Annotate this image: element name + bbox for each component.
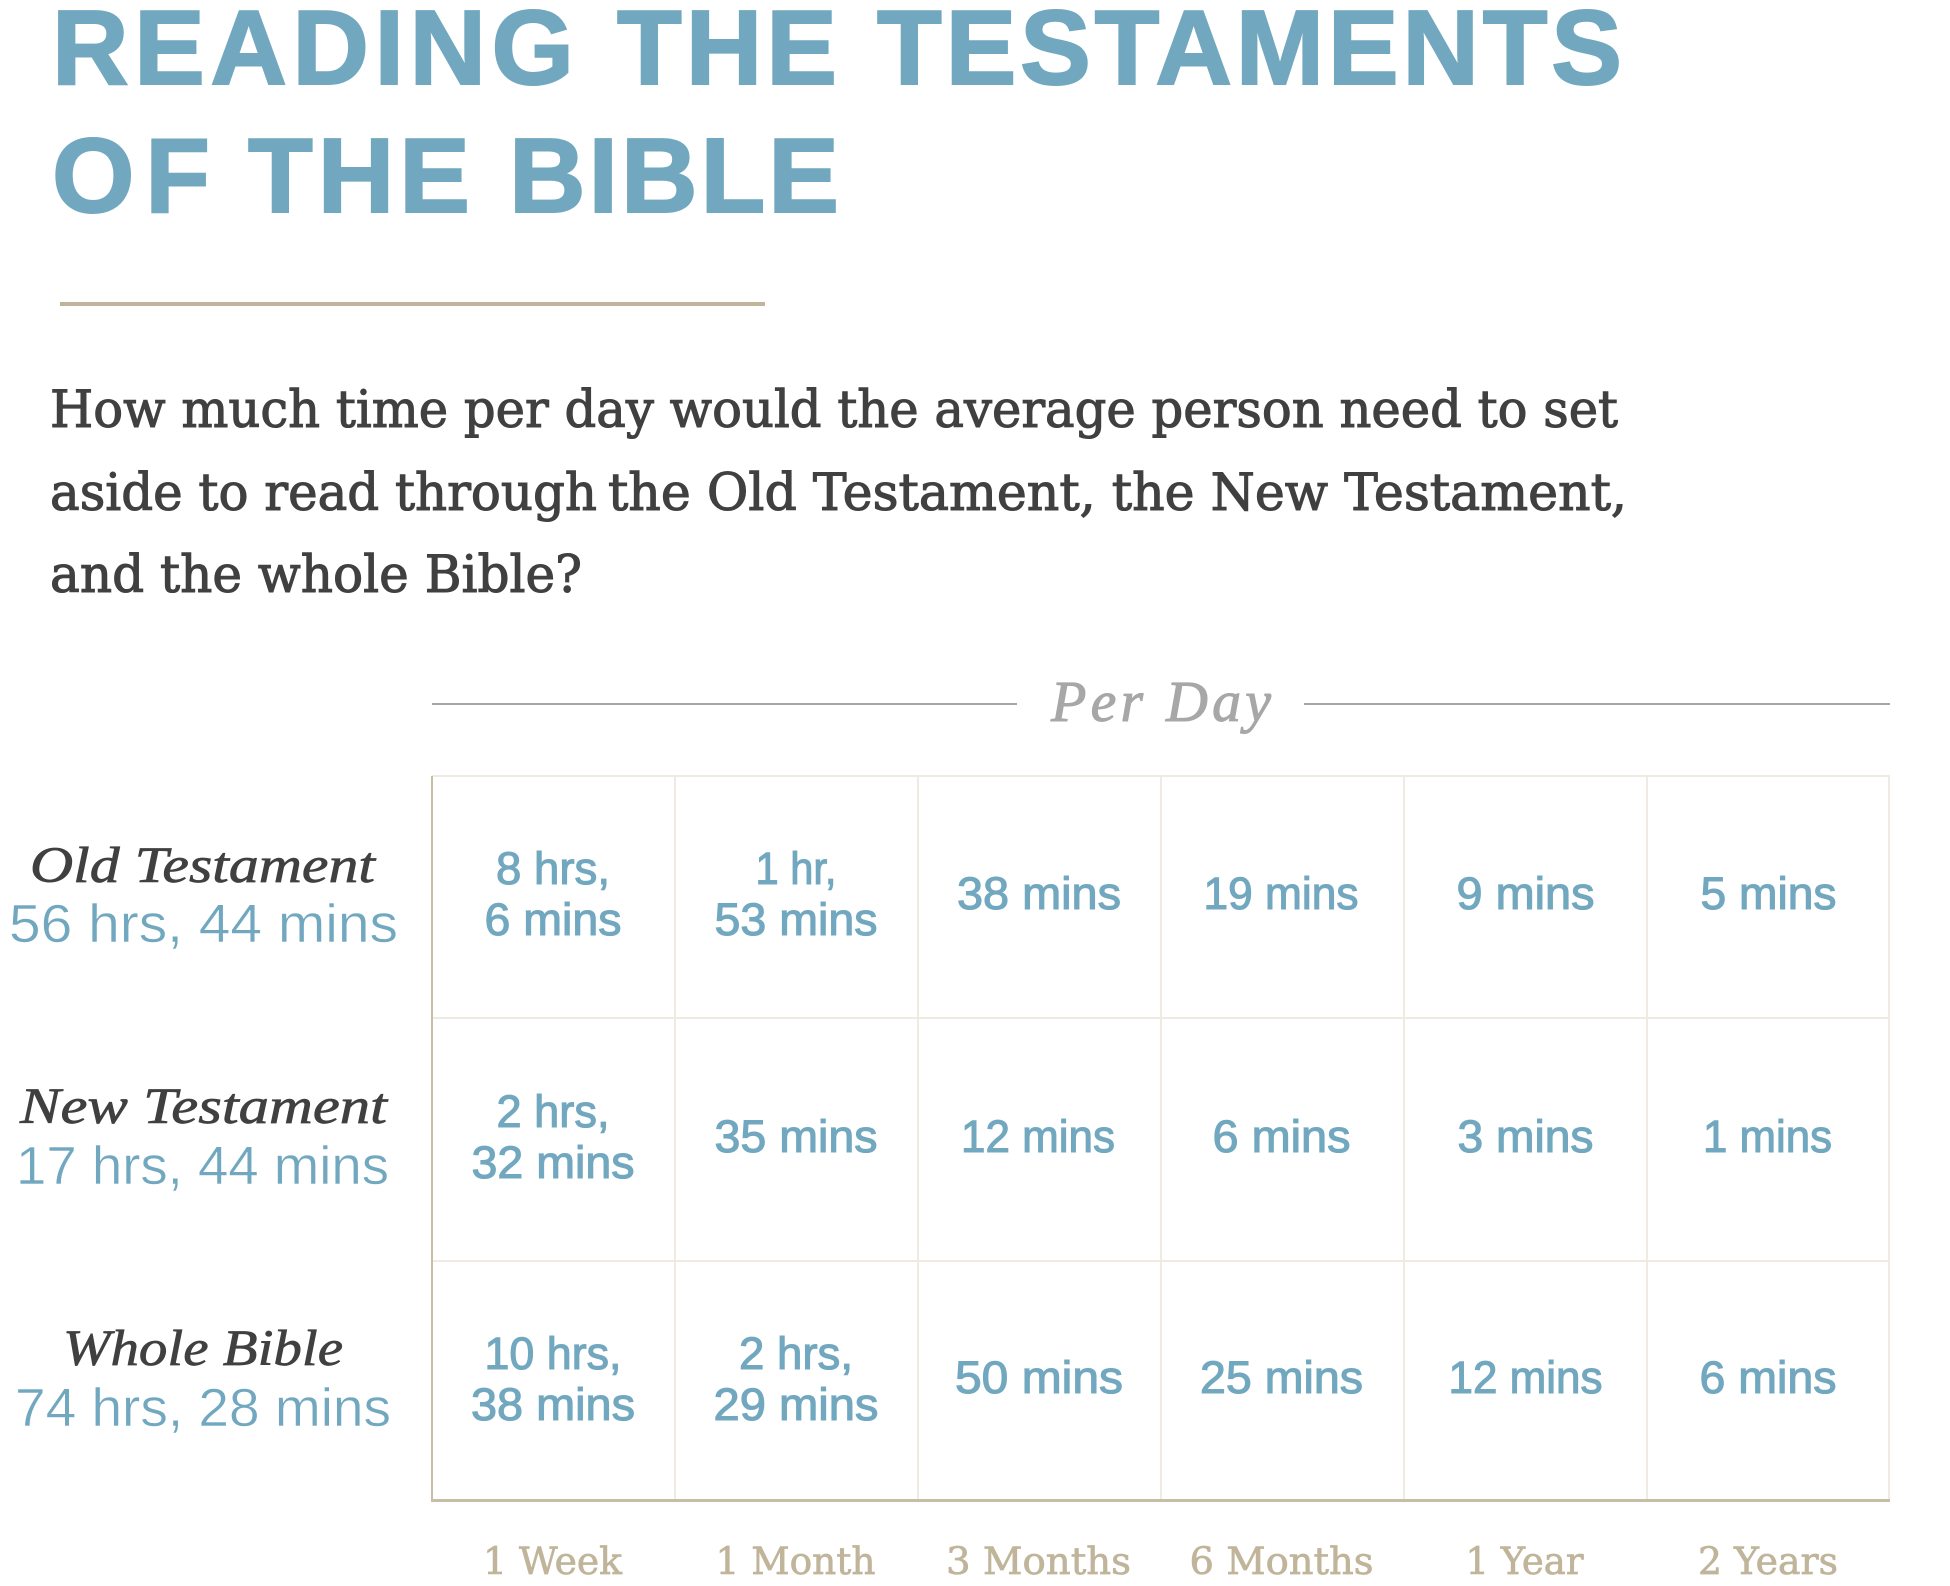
title — [52, 0, 1622, 235]
table values: old testament: 53 mins — [714, 894, 878, 945]
table values: whole bible: 2 hrs, — [739, 1328, 853, 1379]
label: whole bible — [15, 1321, 391, 1438]
table values: old testament: 6 mins — [484, 894, 622, 945]
x-axis labels: 2 Years — [1698, 1540, 1838, 1583]
label: old testament: Old Testament — [30, 838, 377, 894]
title: THE — [248, 117, 470, 235]
intro text — [50, 381, 1627, 605]
intro text: and the whole Bible? — [50, 546, 582, 605]
label: new testament — [16, 1079, 389, 1196]
x-axis labels: 6 Months — [1190, 1540, 1374, 1583]
table values: new testament: 35 mins — [714, 1111, 878, 1162]
table values: whole bible: 29 mins — [714, 1379, 878, 1430]
table values: old testament: 9 mins — [1456, 868, 1594, 919]
table values: whole bible: 12 mins — [1448, 1352, 1602, 1403]
x-axis labels: 3 Months — [946, 1540, 1131, 1583]
table values: new testament: 2 hrs, — [496, 1086, 610, 1137]
x-axis labels — [483, 1540, 1838, 1583]
table values: new testament: 32 mins — [472, 1137, 634, 1188]
intro text: aside to read through — [50, 464, 597, 523]
table values: whole bible: 10 hrs, — [484, 1328, 622, 1379]
label: old testament: 56 hrs, 44 mins — [9, 894, 398, 954]
label: new testament: 17 hrs, 44 mins — [16, 1136, 389, 1196]
row labels — [9, 838, 398, 1438]
intro text: the Old Testament, the New Testament, — [608, 464, 1627, 523]
x-axis labels: 1 Month — [716, 1540, 876, 1583]
x-axis labels: 1 Week — [483, 1540, 623, 1583]
table values: whole bible — [471, 1328, 1836, 1430]
table values: new testament: 6 mins — [1212, 1111, 1350, 1162]
label: whole bible: 74 hrs, 28 mins — [15, 1378, 391, 1438]
table values: new testament: 3 mins — [1458, 1111, 1594, 1162]
table grid — [431, 775, 1890, 1502]
per day heading: Per Day — [1050, 669, 1271, 734]
table values: whole bible: 6 mins — [1700, 1352, 1836, 1403]
title underline — [60, 302, 765, 306]
table values: old testament — [484, 843, 1836, 945]
title: OF — [52, 117, 210, 235]
table values: old testament: 1 hr, — [756, 843, 836, 894]
label: whole bible: Whole Bible — [63, 1321, 343, 1377]
intro text: How much time per day would the average person need to set — [50, 381, 1618, 440]
table values: whole bible: 25 mins — [1200, 1352, 1363, 1403]
table values: old testament: 38 mins — [957, 868, 1121, 919]
title: BIBLE — [509, 117, 839, 235]
table values: old testament: 5 mins — [1700, 868, 1836, 919]
x-axis labels: 1 Year — [1466, 1540, 1584, 1583]
label: old testament — [9, 838, 398, 954]
table values: new testament — [472, 1086, 1832, 1188]
label: new testament: New Testament — [19, 1079, 389, 1135]
table values: whole bible: 38 mins — [471, 1379, 635, 1430]
table values: old testament: 8 hrs, — [496, 843, 610, 894]
table values: whole bible: 50 mins — [955, 1352, 1123, 1403]
table values: old testament: 19 mins — [1204, 868, 1358, 919]
table values: new testament: 1 mins — [1703, 1111, 1832, 1162]
table values: new testament: 12 mins — [961, 1111, 1115, 1162]
